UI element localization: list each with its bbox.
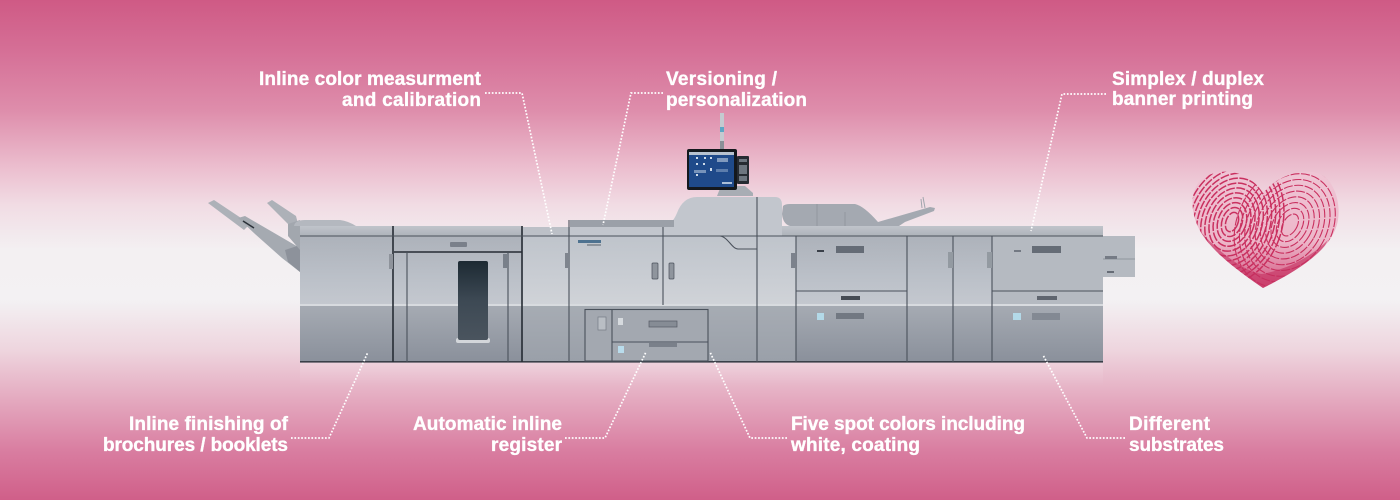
- callout: inline color measurement: Inline color measurment: [259, 69, 482, 90]
- paper tray top: [570, 220, 674, 227]
- callout: versioning: [603, 69, 807, 225]
- callout: inline finishing: [103, 352, 368, 456]
- callout: inline color measurement: [259, 69, 552, 234]
- callout: spot colors: Five spot colors including: [791, 414, 1025, 435]
- top cover bar: [300, 226, 1103, 236]
- door handles: [389, 242, 992, 279]
- callout: banner printing: [1031, 69, 1264, 231]
- callout: inline color measurement: and calibration: [342, 90, 481, 111]
- dark lower rim: [1200, 231, 1328, 288]
- callout: automatic register: Automatic inline: [413, 414, 562, 435]
- right top sheet feeder: [782, 197, 935, 226]
- upper body panels: [300, 236, 1103, 305]
- touch-screen monitor: [687, 149, 753, 196]
- banner output unit: [1103, 236, 1135, 277]
- heart fingerprint icon: [1192, 172, 1338, 288]
- left fingerprint ridges: [1192, 172, 1285, 278]
- printing press machine: [208, 113, 1135, 363]
- brand badge: [578, 240, 601, 246]
- callout: versioning: Versioning /: [666, 69, 778, 90]
- callout: inline finishing: Inline finishing of: [129, 414, 289, 435]
- callout: substrates: [1043, 355, 1224, 456]
- callout: inline finishing: brochures / booklets: [103, 435, 288, 456]
- right fingerprint ridges: [1234, 173, 1336, 286]
- callout: versioning: personalization: [666, 90, 807, 111]
- callout: banner printing: Simplex / duplex: [1112, 69, 1264, 90]
- callout: substrates: substrates: [1129, 435, 1224, 456]
- callout: substrates: Different: [1129, 414, 1211, 435]
- finisher output trays: [208, 200, 356, 272]
- panel lines: [300, 197, 1103, 362]
- callout: spot colors: white, coating: [790, 435, 920, 456]
- callout: banner printing: banner printing: [1112, 89, 1253, 110]
- feeder drawers handles: [817, 246, 1061, 320]
- lower body panels: [300, 304, 1103, 363]
- callout: automatic register: register: [491, 435, 563, 456]
- callout: spot colors: [710, 352, 1025, 456]
- main hump body: [663, 197, 782, 228]
- floor reflection: [300, 362, 1103, 386]
- light tower: [720, 113, 724, 149]
- finisher viewing window: [456, 261, 490, 343]
- callout: automatic register: [413, 352, 646, 456]
- drawer block: [585, 310, 708, 361]
